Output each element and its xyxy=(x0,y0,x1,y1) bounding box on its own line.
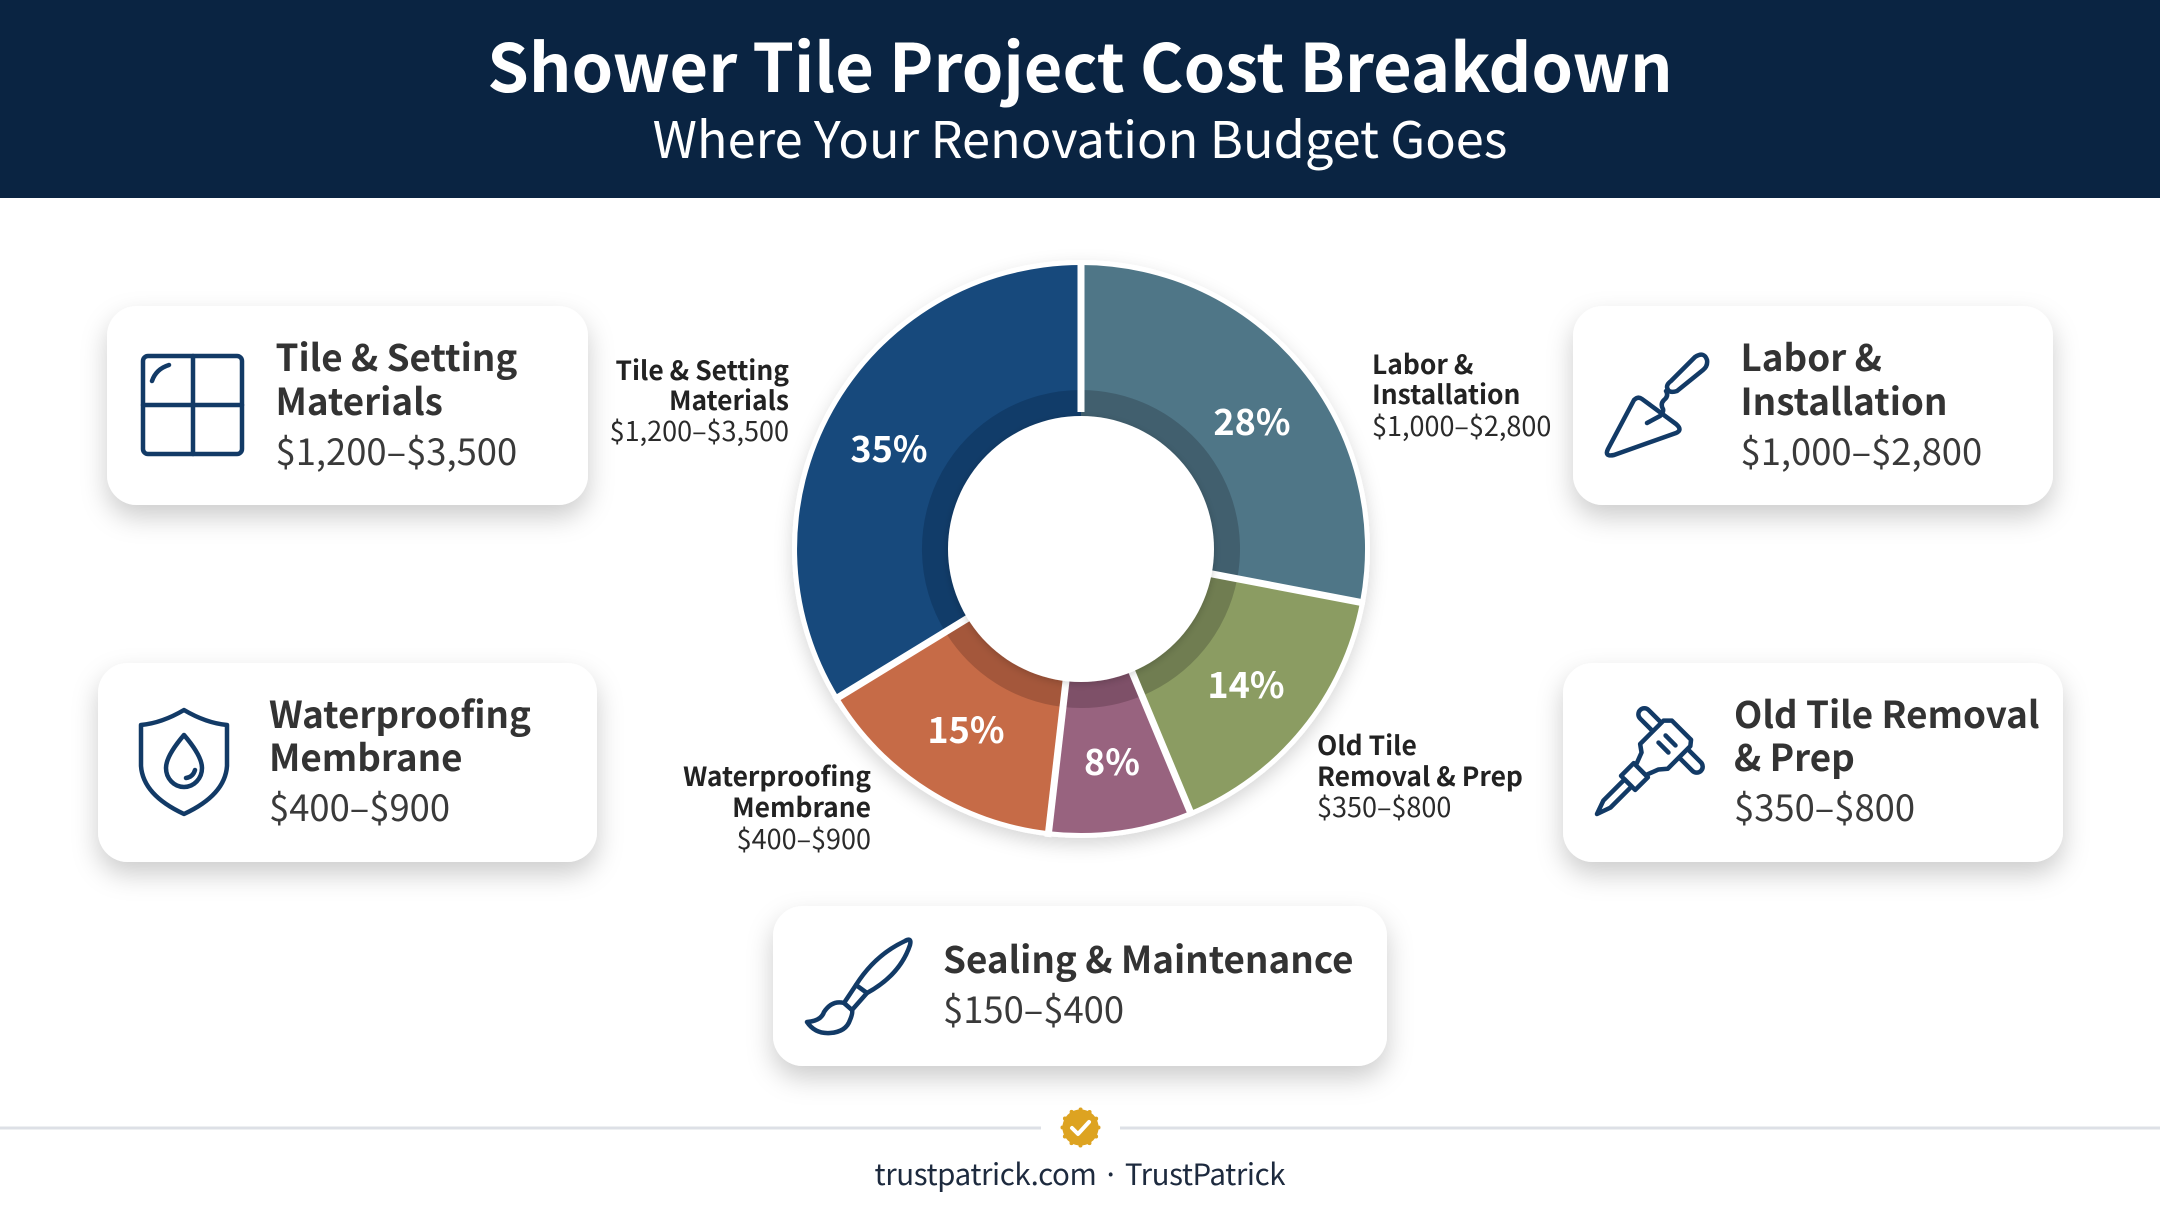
card text: Materials xyxy=(276,372,443,426)
card text: $150–$400 xyxy=(943,982,1124,1034)
chart label: old tile removal and prep xyxy=(1317,724,1523,825)
icon: trowel xyxy=(1607,355,1707,455)
header banner xyxy=(0,0,2160,198)
segment: sealing and maintenance 8% xyxy=(1049,670,1190,833)
segment: tile and setting materials 35% xyxy=(797,265,1081,697)
card text: Old Tile Removal xyxy=(1734,685,2039,739)
title: Shower Tile Project Cost Breakdown xyxy=(487,16,1673,112)
icon: shield with water drop xyxy=(141,710,227,814)
chart label: waterproofing membrane: Membrane xyxy=(732,786,871,825)
chart label: waterproofing membrane xyxy=(683,755,871,857)
chart label: old tile removal and prep: $350–$800 xyxy=(1317,786,1451,825)
chart label: labor and installation xyxy=(1372,343,1551,444)
card text: Sealing & Maintenance xyxy=(943,930,1354,984)
icon: tile grid xyxy=(143,356,242,454)
card text: Installation xyxy=(1740,372,1948,426)
icon: check badge xyxy=(1062,1110,1098,1146)
card text: Waterproofing xyxy=(269,685,531,739)
card text xyxy=(276,328,517,476)
card: old tile removal and prep xyxy=(1563,663,2063,862)
card text xyxy=(943,930,1354,1034)
footer text: trustpatrick.com · TrustPatrick xyxy=(874,1152,1286,1194)
card: waterproofing membrane xyxy=(98,663,597,862)
segment: labor and installation 28%: 28% xyxy=(1213,394,1291,446)
subtitle: Where Your Renovation Budget Goes xyxy=(653,99,1507,173)
card text: $400–$900 xyxy=(269,780,450,832)
card text: $1,000–$2,800 xyxy=(1740,424,1982,476)
chart label: labor and installation: Labor & xyxy=(1372,343,1473,382)
segment: waterproofing membrane 15%: 15% xyxy=(927,702,1005,754)
donut chart xyxy=(792,260,1370,838)
segment: waterproofing membrane 15% xyxy=(839,617,1066,831)
chart label: tile and setting materials xyxy=(610,349,789,449)
chart label: tile and setting materials: $1,200–$3,500 xyxy=(610,410,789,449)
card text xyxy=(269,685,531,832)
card: sealing and maintenance xyxy=(773,906,1387,1066)
card text xyxy=(1740,328,1982,476)
chart label: waterproofing membrane: Waterproofing xyxy=(683,755,871,794)
icon: paint brush xyxy=(807,940,910,1033)
segment: old tile removal and prep 14% xyxy=(1131,574,1360,811)
card text: & Prep xyxy=(1734,728,1855,782)
chart label: old tile removal and prep: Old Tile xyxy=(1317,724,1417,763)
card: tile and setting materials xyxy=(107,306,588,505)
chart label: tile and setting materials: Materials xyxy=(669,379,789,418)
card text xyxy=(1734,685,2039,832)
segment: sealing and maintenance 8%: 8% xyxy=(1084,734,1140,786)
donut centre xyxy=(948,416,1214,682)
card text: Membrane xyxy=(269,728,463,782)
chart label: old tile removal and prep: Removal & Prep xyxy=(1317,755,1523,794)
card text: Labor & xyxy=(1740,328,1882,382)
segment: tile and setting materials 35%: 35% xyxy=(850,421,928,473)
footer xyxy=(0,1110,2160,1194)
chart label: labor and installation: Installation xyxy=(1372,373,1520,412)
card text: $350–$800 xyxy=(1734,780,1915,832)
chart label: labor and installation: $1,000–$2,800 xyxy=(1372,405,1551,444)
segment: labor and installation 28% xyxy=(1081,265,1365,602)
card: labor and installation xyxy=(1573,306,2053,505)
card text: Tile & Setting xyxy=(276,328,517,382)
icon: jackhammer xyxy=(1567,699,1712,844)
segment: old tile removal and prep 14%: 14% xyxy=(1207,657,1285,709)
chart label: tile and setting materials: Tile & Setting xyxy=(616,349,789,388)
card text: $1,200–$3,500 xyxy=(276,424,517,476)
chart label: waterproofing membrane: $400–$900 xyxy=(737,818,871,857)
